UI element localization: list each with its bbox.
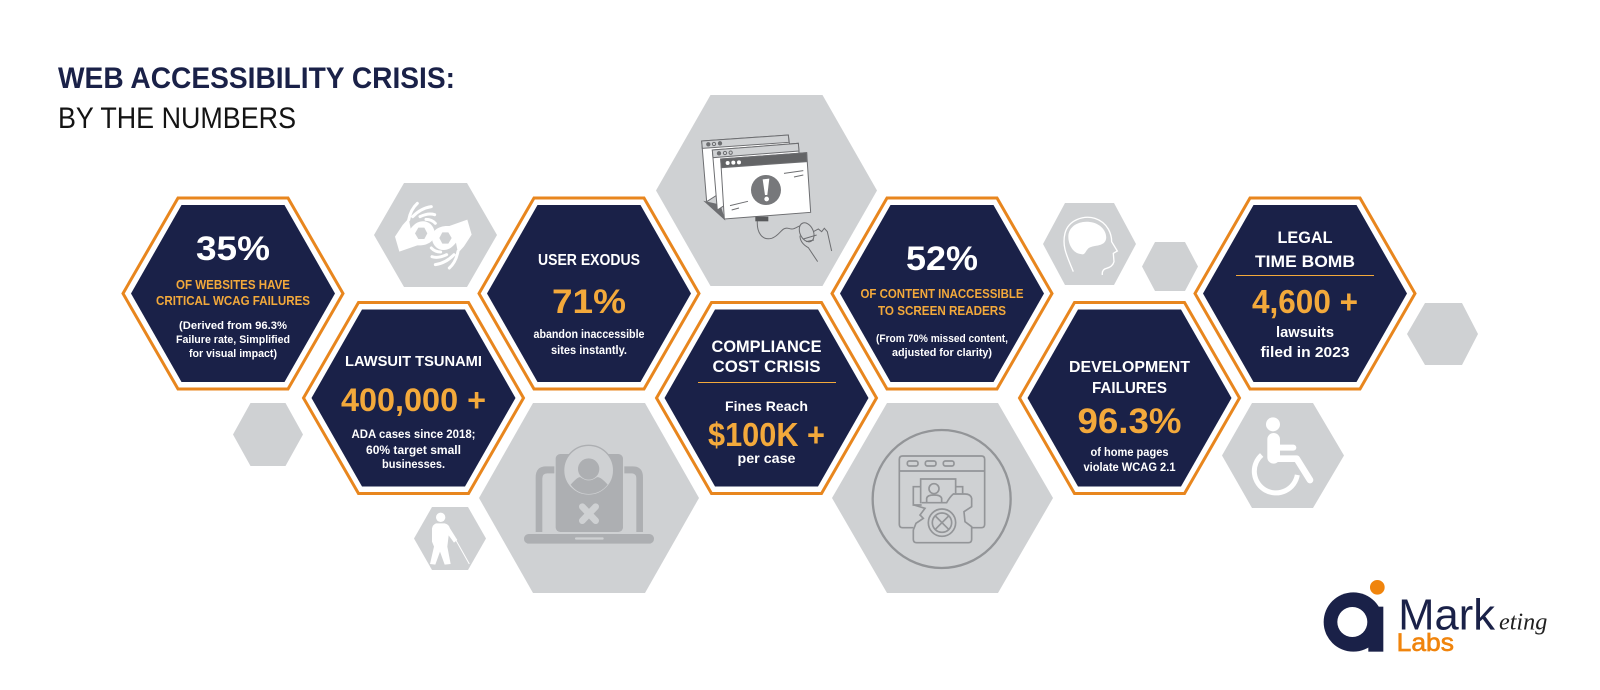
heading: content inaccessible: TO SCREEN READERS — [878, 303, 1006, 318]
heading: user exodus: USER EXODUS — [538, 252, 640, 269]
logo: aiMarketing Labs: Labs — [1397, 629, 1454, 657]
note: missed content: (From 70% missed content, — [876, 333, 1008, 345]
description: lawsuits filed — [1260, 325, 1350, 361]
note: derivation: for visual impact) — [189, 348, 277, 360]
heading: compliance cost crisis: COST CRISIS — [712, 358, 820, 376]
description: ADA cases: 60% target small — [366, 443, 461, 457]
logo: aiMarketing Labs: eting — [1499, 609, 1547, 635]
note: derivation: (Derived from 96.3% — [179, 320, 287, 332]
heading: development failures: FAILURES — [1092, 380, 1167, 397]
description: abandon sites — [534, 327, 645, 357]
logo: aiMarketing Labs: Mark — [1398, 591, 1495, 639]
icon hexagon: head with brain — [1043, 203, 1136, 285]
description: abandon sites: abandon inaccessible — [534, 327, 645, 341]
heading: content inaccessible — [860, 286, 1024, 318]
note: derivation: Failure rate, Simplified — [176, 334, 290, 346]
icon hexagon: wheelchair — [1222, 403, 1344, 508]
stat: $100K+: $100K + — [708, 416, 825, 453]
note: missed content: adjusted for clarity) — [892, 347, 992, 359]
small decorative hexagon left — [233, 403, 303, 466]
logo: aiMarketing Labs — [1324, 580, 1547, 657]
description: abandon sites: sites instantly. — [551, 343, 627, 357]
title — [58, 62, 455, 135]
heading: compliance cost crisis: COMPLIANCE — [712, 338, 822, 356]
heading: development failures: DEVELOPMENT — [1069, 359, 1190, 376]
heading: websites with critical failures — [156, 277, 310, 308]
heading: lawsuit tsunami: LAWSUIT TSUNAMI — [345, 353, 482, 370]
label: per case: per case — [738, 450, 796, 466]
stat: 96.3%: 96.3% — [1078, 402, 1182, 441]
icon hexagon: sign language — [374, 183, 497, 287]
description: lawsuits filed: lawsuits — [1276, 325, 1334, 341]
heading: legal time bomb: TIME BOMB — [1255, 252, 1355, 271]
heading: websites with critical failures: CRITICAL WCAG FAILURES — [156, 293, 310, 308]
panel: 52% inaccessible content — [832, 198, 1052, 389]
description: ADA cases: ADA cases since 2018; — [352, 427, 476, 441]
icon hexagon: laptop user rejected — [479, 403, 699, 593]
heading: legal time bomb — [1255, 228, 1355, 271]
small decorative hexagon near brain — [1142, 242, 1198, 291]
title: WEB ACCESSIBILITY CRISIS: — [58, 62, 455, 95]
description: lawsuits filed: filed in 2023 — [1260, 345, 1350, 361]
stat: 35%: 35% — [196, 230, 270, 268]
icon hexagon: browser windows alert — [656, 95, 877, 286]
label: fines reach: Fines Reach — [725, 398, 808, 414]
description: ADA cases — [352, 427, 476, 471]
panel: lawsuit tsunami — [304, 302, 524, 494]
panel: user exodus — [479, 198, 699, 389]
panel: compliance cost crisis — [656, 302, 876, 494]
heading: content inaccessible: OF CONTENT INACCESSIBLE — [860, 286, 1024, 301]
description: ADA cases: businesses. — [382, 457, 445, 471]
panel: legal time bomb — [1195, 198, 1415, 389]
stat: 71%: 71% — [552, 283, 626, 321]
heading: legal time bomb: LEGAL — [1278, 228, 1332, 247]
stat: 400,000+: 400,000 + — [341, 382, 486, 418]
panel: 35% critical WCAG failures — [123, 198, 343, 389]
note: missed content — [876, 333, 1008, 359]
stat: 52%: 52% — [906, 240, 978, 278]
description: home pages — [1084, 447, 1176, 474]
icon hexagon: blind person with cane — [414, 507, 486, 570]
heading: development failures — [1069, 359, 1190, 397]
small decorative hexagon right — [1407, 303, 1478, 365]
description: home pages: of home pages — [1090, 447, 1168, 459]
stat: 4,600+: 4,600 + — [1252, 283, 1358, 320]
heading: compliance cost crisis — [712, 338, 822, 376]
title: BY THE NUMBERS — [58, 102, 296, 135]
note: derivation — [176, 320, 290, 360]
panel: development failures — [1020, 302, 1240, 494]
icon hexagon: broken web content — [832, 403, 1053, 593]
heading: websites with critical failures: OF WEBSITES HAVE — [176, 277, 290, 292]
description: home pages: violate WCAG 2.1 — [1084, 462, 1176, 474]
